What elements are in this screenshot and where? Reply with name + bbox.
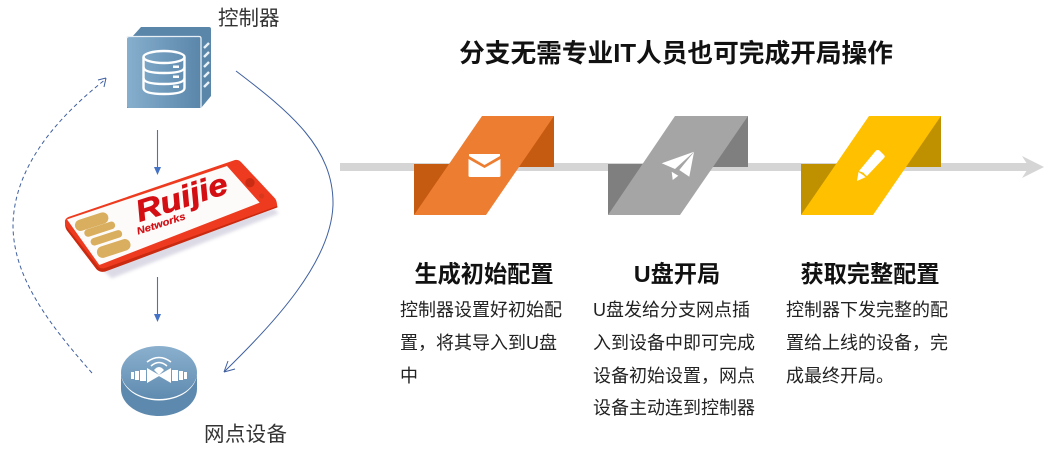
contact pads xyxy=(73,211,132,259)
step 1 heading: 生成初始配置 xyxy=(414,261,554,287)
logo text: Networks xyxy=(136,211,188,237)
branch device label: 网点设备 xyxy=(204,423,287,446)
icon: Ruijie USB drive xyxy=(65,160,279,278)
step 3 description: 控制器下发完整的配 xyxy=(786,300,948,320)
step 1 description xyxy=(400,300,562,386)
step 3 heading: 获取完整配置 xyxy=(800,261,940,287)
step 3 description: 置给上线的设备，完 xyxy=(786,333,948,353)
icon: paper plane xyxy=(662,152,694,180)
icon: controller server xyxy=(127,27,211,108)
title: 分支无需专业IT人员也可完成开局操作 xyxy=(459,39,893,68)
arrow: controller to branch device (solid curve) xyxy=(224,71,333,372)
logo text xyxy=(126,168,234,237)
step 3 description: 成最终开局。 xyxy=(786,366,894,386)
step 1 description: 中 xyxy=(400,366,418,386)
step 1 description: 控制器设置好初始配 xyxy=(400,300,562,320)
step 2 description: U盘发给分支网点插 xyxy=(593,300,750,320)
step 3 banner: yellow with pencil icon xyxy=(801,116,941,215)
step 2 banner: gray with paper plane icon xyxy=(608,116,748,215)
arrow: branch device to controller (dashed curve) xyxy=(13,78,106,373)
step 2 description xyxy=(593,300,755,418)
arrow: USB to branch device xyxy=(154,277,161,322)
step 2 description: 设备初始设置，网点 xyxy=(593,366,755,386)
arrow: controller to USB xyxy=(154,130,161,175)
step 1 description: 置，将其导入到U盘 xyxy=(400,333,557,353)
step 3 description xyxy=(786,300,948,386)
icon: branch router xyxy=(121,346,197,416)
step 2 description: 设备主动连到控制器 xyxy=(593,398,755,418)
step 2 description: 入到设备中即可完成 xyxy=(593,333,755,353)
controller label: 控制器 xyxy=(218,7,280,30)
icon: pencil xyxy=(857,150,885,181)
icon: envelope xyxy=(468,154,500,177)
step 2 heading: U盘开局 xyxy=(634,261,720,287)
logo text: Ruijie xyxy=(131,168,232,229)
timeline arrow xyxy=(340,156,1044,178)
step 1 banner: orange with mail icon xyxy=(414,116,554,215)
